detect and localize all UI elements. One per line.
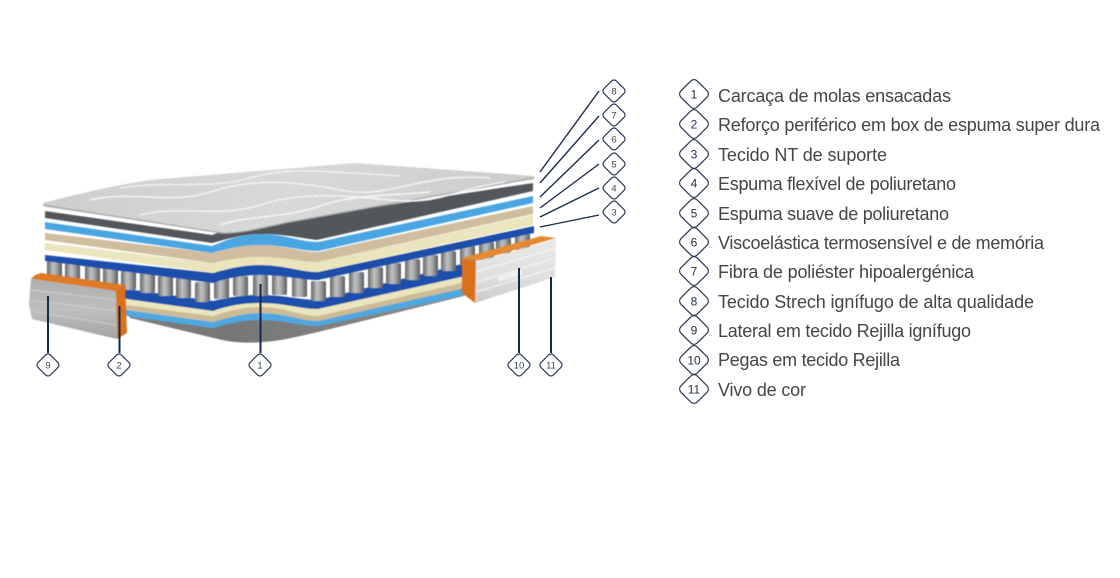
- legend item 5: 5: [691, 206, 698, 220]
- callout 8: 8: [611, 86, 617, 98]
- mattress cross-section: [43, 163, 534, 343]
- legend item 1: [678, 78, 951, 110]
- legend item 11: [678, 373, 806, 405]
- legend item 2: 2: [691, 118, 698, 132]
- legend item 7: [678, 255, 975, 287]
- legend item 7: Fibra de poliéster hipoalergénica: [718, 262, 975, 282]
- callout 4: [540, 176, 626, 217]
- legend item 2: Reforço periférico em box de espuma super dura: [718, 115, 1101, 135]
- callout 5: [540, 152, 626, 208]
- light blue layer (6): [45, 196, 533, 253]
- legend item 9: Lateral em tecido Rejilla ignífugo: [718, 321, 971, 341]
- callout 8: [540, 79, 626, 172]
- springs: [47, 234, 530, 302]
- legend item 4: 4: [691, 176, 698, 190]
- legend item 7: 7: [691, 264, 698, 278]
- callout 7: [540, 103, 626, 183]
- callout 2: [107, 306, 131, 377]
- legend item 3: [678, 138, 887, 170]
- legend item 5: Espuma suave de poliuretano: [718, 204, 949, 224]
- callout 5: 5: [611, 160, 617, 170]
- callout 11: [539, 277, 563, 377]
- tan layer (5): [45, 206, 533, 263]
- orange foam end: [462, 258, 476, 303]
- white mesh side panel: [475, 239, 556, 303]
- legend item 10: Pegas em tecido Rejilla: [718, 350, 901, 370]
- callout 7: 7: [611, 110, 617, 122]
- lower cream layer: [105, 273, 470, 316]
- handle: [496, 268, 524, 282]
- legend item 4: [678, 167, 956, 199]
- left side block: [29, 273, 127, 339]
- legend item 6: 6: [691, 236, 698, 250]
- orange foam end: [116, 285, 127, 339]
- callout 1: [248, 284, 272, 377]
- callout 6: 6: [611, 134, 617, 146]
- legend item 8: 8: [691, 294, 698, 308]
- legend item 8: [678, 285, 1034, 317]
- callout 4: 4: [611, 184, 617, 194]
- legend item 9: 9: [691, 324, 698, 338]
- legend item 11: 11: [688, 382, 701, 396]
- orange foam top: [462, 236, 556, 261]
- callout 3: [540, 200, 626, 227]
- orange foam top: [31, 273, 126, 291]
- lower light blue layer: [105, 286, 470, 328]
- dark grey layer (7): [45, 183, 533, 243]
- legend item 1: Carcaça de molas ensacadas: [718, 86, 951, 106]
- callout 10: [507, 268, 531, 377]
- legend item 2: [678, 108, 1101, 140]
- legend item 6: [678, 226, 1045, 258]
- legend item 8: Tecido Strech ignífugo de alta qualidade: [718, 292, 1034, 312]
- callout 1: 1: [257, 360, 263, 372]
- legend: [678, 78, 1101, 405]
- callout 9: 9: [45, 360, 51, 372]
- base fabric: [125, 288, 465, 343]
- grey mesh side panel: [29, 279, 117, 339]
- legend item 3: Tecido NT de suporte: [718, 145, 887, 165]
- callout 6: [540, 127, 626, 197]
- callout 9: [36, 296, 60, 377]
- legend item 3: 3: [691, 148, 698, 162]
- legend item 9: [678, 314, 971, 346]
- legend item 11: Vivo de cor: [718, 380, 806, 400]
- callout 3: 3: [611, 208, 617, 218]
- cream layer (4): [45, 215, 533, 273]
- legend item 4: Espuma flexível de poliuretano: [718, 174, 956, 194]
- legend item 10: 10: [687, 354, 701, 368]
- callout 2: 2: [116, 360, 122, 372]
- legend item 10: [678, 344, 901, 376]
- callout 10: 10: [514, 360, 524, 372]
- legend item 6: Viscoelástica termosensível e de memória: [718, 233, 1045, 253]
- lower tan layer: [105, 280, 470, 322]
- upper dark blue layer (3): [45, 226, 534, 283]
- legend item 1: 1: [691, 88, 698, 102]
- legend item 5: [678, 197, 949, 229]
- callout 11: 11: [546, 360, 556, 372]
- quilted top layer (8): [43, 163, 534, 233]
- lower dark blue layer: [105, 262, 470, 311]
- right side block: [462, 236, 556, 303]
